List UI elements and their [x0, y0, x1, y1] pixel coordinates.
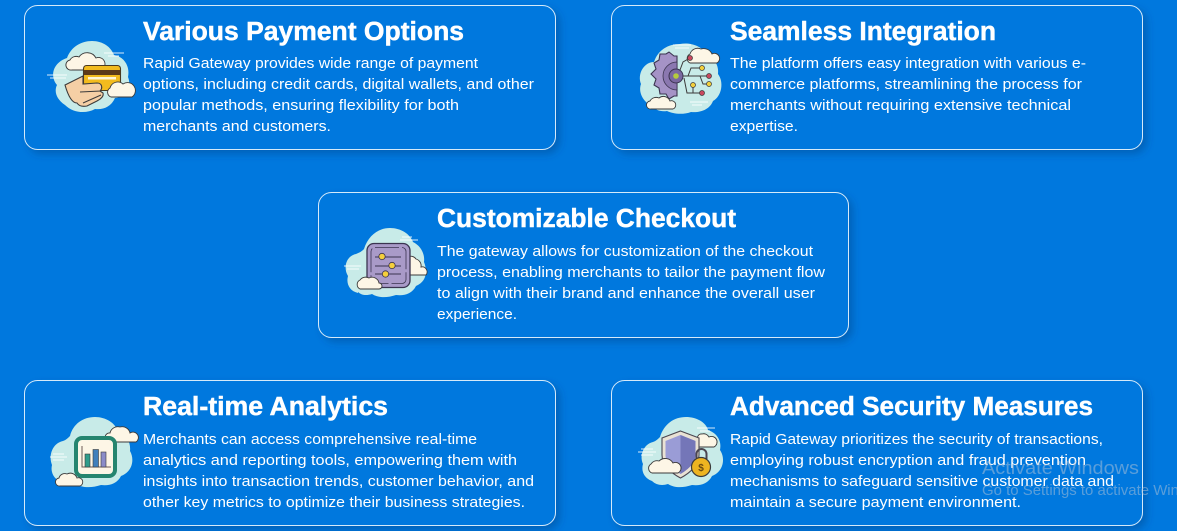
text block: mechanisms to safeguard sensitive customer data and — [730, 474, 1114, 490]
text block: analytics and reporting tools, empowering them with — [143, 453, 517, 469]
text block: expertise. — [730, 119, 798, 135]
text block: employing robust encryption and fraud prevention — [730, 453, 1086, 469]
text block — [730, 56, 1086, 135]
text block: options, including credit cards, digital wallets, and other — [143, 77, 534, 93]
text block: to align with their brand and enhance the overall user — [437, 286, 815, 302]
heading: Advanced Security Measures — [730, 393, 1093, 421]
icon: shield with padlock — [638, 417, 723, 487]
watermark: Activate Windows — [982, 457, 1177, 499]
text block: merchants and customers. — [143, 119, 331, 135]
text block: commerce platforms, streamlining the process for — [730, 77, 1082, 93]
panel: Real-time Analytics — [24, 380, 556, 526]
heading: Seamless Integration — [730, 18, 996, 46]
text block — [143, 432, 534, 511]
text block: Rapid Gateway provides wide range of payment — [143, 56, 478, 72]
text block: Merchants can access comprehensive real-time — [143, 432, 477, 448]
text block — [437, 244, 826, 323]
text block: other key metrics to optimize their business strategies. — [143, 495, 525, 511]
icon: hand holding credit card — [47, 41, 135, 112]
icon: settings sliders — [344, 228, 427, 297]
text block: merchants without requiring extensive technical — [730, 98, 1071, 114]
text block: experience. — [437, 307, 517, 323]
text block: popular methods, ensuring flexibility for both — [143, 98, 459, 114]
text block: Rapid Gateway prioritizes the security of transactions, — [730, 432, 1103, 448]
heading: Customizable Checkout — [437, 205, 737, 233]
heading: Various Payment Options — [143, 18, 464, 46]
text block — [143, 56, 534, 135]
text block: process, enabling merchants to tailor the payment flow — [437, 265, 826, 281]
panel: Advanced Security Measures — [612, 380, 1142, 526]
icon: shield with padlock: $ — [698, 463, 704, 474]
icon: gear with circuit — [640, 43, 721, 114]
icon: bar chart — [50, 417, 138, 487]
text block: maintain a secure payment environment. — [730, 495, 1021, 511]
text block: insights into transaction trends, customer behavior, and — [143, 474, 534, 490]
text block: The platform offers easy integration with various e- — [730, 56, 1086, 72]
text block: The gateway allows for customization of the checkout — [437, 244, 813, 260]
watermark: Activate Windows: Activate Windows — [982, 457, 1139, 478]
panel: Customizable Checkout — [318, 192, 848, 338]
panel: Seamless Integration — [612, 6, 1142, 150]
heading: Real-time Analytics — [143, 393, 388, 421]
panel: Various Payment Options — [24, 6, 556, 150]
text block — [730, 432, 1114, 511]
